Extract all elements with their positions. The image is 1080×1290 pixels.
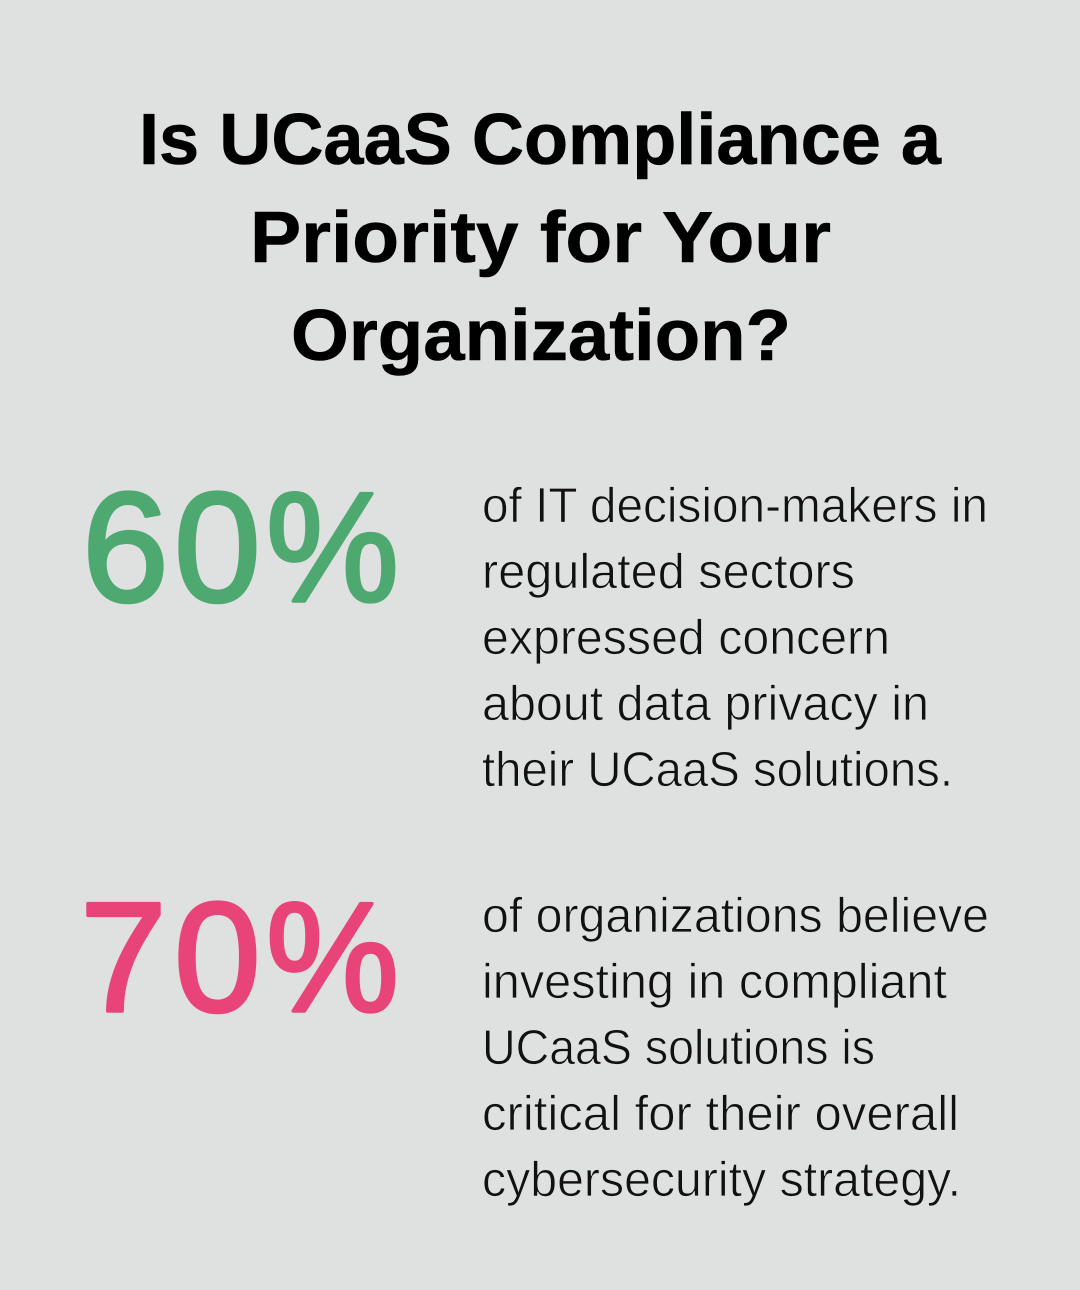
text block: 60% description <box>482 479 988 797</box>
text block: 60% description: about data privacy in <box>482 677 929 731</box>
stat: 60%: % <box>266 461 399 635</box>
stat: 70%: % <box>266 871 399 1045</box>
stat: 60%: 6 <box>82 461 169 635</box>
text block: 60% description: their UCaaS solutions. <box>482 743 953 797</box>
title <box>139 100 942 376</box>
title: Priority for Your <box>250 198 831 278</box>
stat: 70%: 0 <box>174 871 261 1045</box>
title: Organization? <box>291 296 791 376</box>
title: Is UCaaS Compliance a <box>139 100 942 180</box>
text block: 70% description: critical for their overall <box>482 1087 959 1141</box>
stat: 60% <box>82 461 399 635</box>
text block: 60% description: expressed concern <box>482 611 890 665</box>
text block: 60% description: regulated sectors <box>482 545 855 599</box>
stat: 70% <box>80 871 399 1045</box>
text block: 70% description: of organizations believe <box>482 889 989 943</box>
stat: 70%: 7 <box>80 871 167 1045</box>
stat: 60%: 0 <box>174 461 261 635</box>
text block: 70% description <box>482 889 989 1207</box>
text block: 60% description: of IT decision-makers in <box>482 479 988 533</box>
text block: 70% description: UCaaS solutions is <box>482 1021 875 1075</box>
text block: 70% description: cybersecurity strategy. <box>482 1153 961 1207</box>
text block: 70% description: investing in compliant <box>482 955 947 1009</box>
